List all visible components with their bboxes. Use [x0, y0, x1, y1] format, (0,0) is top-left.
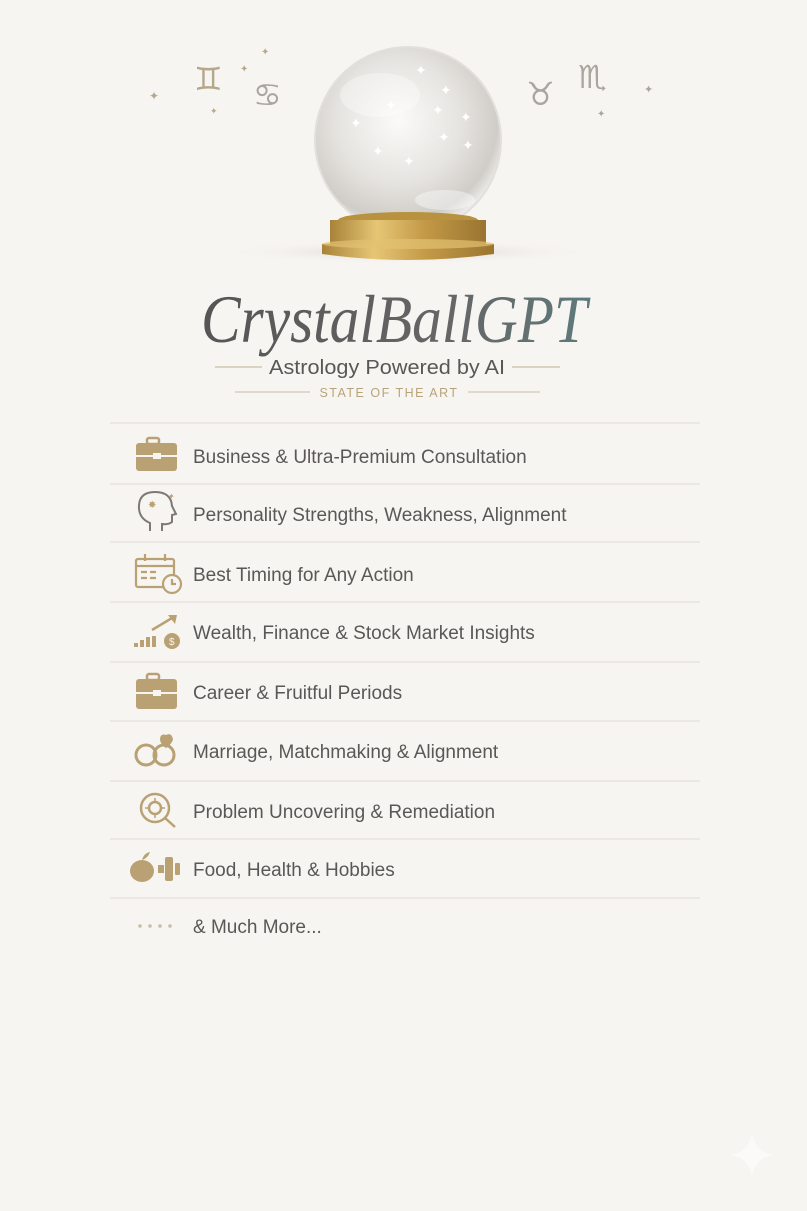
- gold stand: [322, 212, 494, 260]
- zodiac symbols right: ✦: [644, 83, 653, 96]
- zodiac symbols right: ✦: [597, 109, 605, 120]
- subtitle: Astrology Powered by AI: [269, 357, 505, 379]
- title: CrystalBallGPT: [201, 281, 591, 357]
- icon: apple dumbbell: [130, 852, 180, 882]
- item 2: Personality Strengths, Weakness, Alignment: [193, 505, 567, 526]
- icon: magnifier: [141, 794, 175, 827]
- zodiac symbols left: ✦: [149, 89, 159, 103]
- crystal ball: ✦: [460, 110, 472, 126]
- icon: briefcase 2: [136, 674, 177, 709]
- crystal ball: ✦: [438, 130, 450, 146]
- item 9: & Much More...: [193, 917, 322, 938]
- item 6: Marriage, Matchmaking & Alignment: [193, 742, 499, 763]
- zodiac symbols left: ✦: [240, 64, 248, 75]
- item 8: Food, Health & Hobbies: [193, 860, 395, 881]
- item 7: Problem Uncovering & Remediation: [193, 802, 495, 823]
- feature list: [130, 438, 567, 938]
- icon: rings: [136, 734, 174, 765]
- item 3: Best Timing for Any Action: [193, 565, 414, 586]
- zodiac symbols right: ♏: [578, 58, 607, 96]
- icon: wealth chart: $: [169, 637, 175, 648]
- tagline: STATE OF THE ART: [319, 386, 459, 400]
- zodiac symbols right: ♉: [526, 75, 555, 113]
- zodiac symbols left: ✦: [261, 47, 269, 58]
- icon: wealth chart: [134, 615, 180, 649]
- zodiac symbols left: ♋: [253, 76, 282, 114]
- crystal ball: ✦: [403, 154, 415, 170]
- watermark sparkle: [731, 1133, 773, 1177]
- crystal ball: ✦: [385, 98, 397, 114]
- crystal ball: [218, 47, 598, 264]
- icon: dots: [138, 924, 172, 928]
- crystal ball: ✦: [462, 138, 474, 154]
- icon: head: [139, 492, 176, 531]
- crystal ball: ✦: [432, 103, 444, 119]
- item 5: Career & Fruitful Periods: [193, 683, 402, 704]
- zodiac symbols left: [149, 47, 282, 117]
- crystal ball: ✦: [350, 116, 362, 132]
- crystal ball: ✦: [440, 83, 452, 99]
- item 1: Business & Ultra-Premium Consultation: [193, 447, 527, 468]
- crystal ball: ✦: [415, 63, 427, 79]
- icon: briefcase: [136, 438, 177, 471]
- zodiac symbols left: ♊: [194, 60, 223, 98]
- icon: head: ✸: [148, 500, 156, 511]
- zodiac symbols left: ✦: [210, 107, 218, 117]
- icon: head: ✦: [168, 492, 175, 501]
- item 4: Wealth, Finance & Stock Market Insights: [193, 623, 535, 644]
- icon: calendar clock: [136, 554, 181, 593]
- zodiac symbols right: [526, 58, 653, 120]
- crystal ball: ✦: [372, 144, 384, 160]
